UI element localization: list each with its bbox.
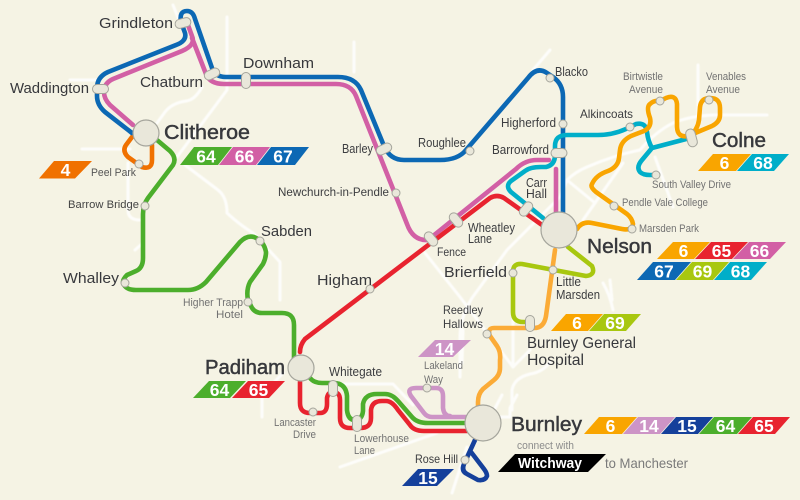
station: Padiham — [205, 355, 314, 381]
route line: 6 to Burnley — [478, 250, 555, 407]
route badges: Burnley — [584, 416, 790, 436]
stop: Grindleton: Grindleton — [99, 15, 173, 32]
stop: Marsden Park: Marsden Park — [639, 223, 699, 235]
route line: 64 south — [310, 378, 467, 423]
route badges: Colne: 6 — [720, 153, 730, 173]
route badges: Burnley General Hospital — [551, 313, 641, 333]
station: Padiham: Padiham — [205, 357, 285, 379]
stop: Higher Trapp Hotel — [183, 297, 252, 321]
stop: Alkincoats: Alkincoats — [580, 107, 633, 121]
stop: Fence: Fence — [437, 247, 466, 259]
route badges: Padiham: 65 — [249, 380, 268, 400]
route line: 69 — [513, 247, 593, 322]
stop: Carr Hall: Hall — [526, 187, 547, 201]
route badges: Burnley: 15 — [677, 416, 697, 436]
route line: 14 — [409, 388, 467, 417]
stop: Chatburn — [140, 67, 221, 91]
route badges: Burnley: 65 — [754, 416, 774, 436]
route badges: Nelson: 6 — [679, 241, 689, 261]
stop: Wheatley Lane: Wheatley — [468, 221, 516, 235]
stop: Lancaster Drive — [274, 408, 317, 441]
stop: Brierfield: Brierfield — [444, 264, 507, 281]
route badges: Nelson: 68 — [731, 262, 750, 282]
route badges: Burnley: 64 — [716, 416, 735, 436]
stop: Little Marsden: Little — [556, 275, 581, 289]
stop: Lakeland Way: Lakeland — [424, 360, 463, 372]
stop: Whitegate — [328, 365, 382, 396]
stop: South Valley Drive: South Valley Drive — [652, 179, 731, 191]
route badges: Burnley: 6 — [606, 416, 616, 436]
stop: Wheatley Lane — [447, 211, 516, 246]
stop: Lakeland Way: Way — [424, 374, 443, 386]
stop: Venables Avenue: Avenue — [706, 84, 740, 96]
route badges: Nelson: 69 — [693, 262, 712, 282]
stop: Barley: Barley — [342, 142, 374, 156]
route badges: Burnley General Hospital: 69 — [605, 313, 625, 333]
stop: Downham — [242, 55, 314, 88]
route badges: Padiham — [193, 380, 285, 400]
stop: Higher Trapp Hotel: Higher Trapp — [183, 297, 243, 309]
stop: Little Marsden — [549, 266, 600, 302]
stop: Higher Trapp Hotel: Hotel — [216, 309, 243, 321]
stop: Lancaster Drive: Lancaster — [274, 417, 316, 429]
stop: Sabden — [256, 223, 312, 245]
route line: 66 — [104, 25, 549, 240]
connection: Witchway to Manchester: connect with — [517, 440, 574, 452]
stop: Alkincoats — [580, 107, 634, 131]
stop: Burnley General Hospital — [526, 316, 636, 369]
stop: Pendle Vale College: Pendle Vale College — [622, 197, 708, 209]
stop: Higherford: Higherford — [501, 116, 556, 130]
stop: Birtwistle Avenue — [623, 71, 664, 105]
route badge: Rose Hill 15: 15 — [418, 468, 438, 488]
route badges: Clitheroe: 67 — [273, 146, 293, 166]
stop: Barrow Bridge: Barrow Bridge — [68, 199, 139, 211]
route badges: Clitheroe: 66 — [235, 146, 254, 166]
route line: 4 — [124, 137, 152, 168]
stop: Carr Hall — [517, 176, 547, 218]
stop: Barrowford: Barrowford — [492, 143, 549, 157]
route line: 15 — [463, 440, 487, 480]
route badges: Burnley: 14 — [639, 416, 659, 436]
route line: 65 south — [300, 382, 467, 431]
route line: 65 north — [300, 196, 542, 352]
route badges: Clitheroe — [180, 146, 309, 166]
station: Colne: Colne — [712, 130, 766, 152]
stop: Blacko — [546, 65, 588, 82]
connection: Witchway to Manchester — [498, 440, 688, 472]
stop: Lowerhouse Lane — [352, 416, 409, 457]
connection: Witchway to Manchester: to Manchester — [605, 455, 688, 471]
route badges: Clitheroe: 64 — [196, 146, 216, 166]
stop: Newchurch-in-Pendle: Newchurch-in-Pendle — [278, 187, 389, 199]
stop: Lakeland Way — [423, 360, 463, 392]
stop: Lowerhouse Lane: Lowerhouse — [354, 433, 409, 445]
stop: Roughlee: Roughlee — [418, 136, 466, 150]
route badges: Padiham: 64 — [210, 380, 229, 400]
stop: Burnley General Hospital: Hospital — [527, 352, 584, 369]
stop: Blacko: Blacko — [555, 65, 588, 79]
stop: Higham: Higham — [317, 272, 372, 289]
route badges: Burnley General Hospital: 6 — [572, 313, 582, 333]
stop: Lowerhouse Lane: Lane — [354, 445, 375, 457]
stop: Whalley: Whalley — [63, 270, 120, 287]
station: Nelson — [541, 212, 652, 258]
stop: Reedley Hallows: Reedley — [443, 303, 483, 317]
stop: South Valley Drive — [652, 171, 731, 191]
route line: 67 — [97, 11, 563, 215]
route badges: Colne: 68 — [753, 153, 773, 173]
route badge: Peel Park 4: 4 — [61, 160, 71, 180]
route line: 66 to Nelson — [554, 169, 558, 215]
connection: Witchway to Manchester: Witchway — [518, 456, 582, 472]
route badges: Nelson: 66 — [750, 241, 769, 261]
station: Clitheroe — [133, 120, 250, 146]
station: Burnley — [465, 405, 582, 441]
route badge: Lakeland Way 14: 14 — [435, 339, 454, 359]
station: Colne — [685, 128, 766, 152]
station: Nelson: Nelson — [587, 236, 652, 258]
stop: Birtwistle Avenue: Avenue — [629, 84, 663, 96]
stop: Fence — [422, 230, 466, 259]
stop: Reedley Hallows: Hallows — [443, 317, 483, 331]
route line: 6 to Colne — [577, 97, 720, 229]
stop: Waddington: Waddington — [10, 80, 89, 97]
stop: Venables Avenue: Venables — [706, 71, 746, 83]
stop: Reedley Hallows — [443, 303, 491, 338]
stop: Birtwistle Avenue: Birtwistle — [623, 71, 663, 83]
stop: Wheatley Lane: Lane — [468, 232, 492, 246]
stop: Burnley General Hospital: Burnley General — [527, 335, 636, 352]
route badge: Lakeland Way 14 — [418, 339, 471, 359]
stop: Downham: Downham — [243, 55, 314, 72]
stop: Peel Park — [91, 160, 143, 179]
route badges: Nelson: 65 — [712, 241, 731, 261]
route line: 64 north — [123, 140, 294, 358]
stop: Carr Hall: Carr — [526, 176, 547, 190]
stop: Rose Hill: Rose Hill — [415, 452, 458, 466]
stop: Venables Avenue — [705, 71, 746, 104]
stop: Whitegate: Whitegate — [329, 365, 382, 379]
route badge: Rose Hill 15 — [402, 468, 454, 488]
stop: Chatburn: Chatburn — [140, 74, 203, 91]
route badges: Nelson — [637, 241, 786, 282]
stop: Sabden: Sabden — [261, 223, 312, 240]
route badges: Colne — [698, 153, 789, 173]
stop: Peel Park: Peel Park — [91, 167, 136, 179]
station: Clitheroe: Clitheroe — [164, 122, 250, 144]
stop: Barley — [342, 142, 393, 156]
route badge: Peel Park 4 — [39, 160, 92, 180]
route line: 68 — [508, 124, 690, 218]
stop: Little Marsden: Marsden — [556, 288, 600, 302]
stop: Lancaster Drive: Drive — [293, 429, 316, 441]
route badges: Nelson: 67 — [654, 262, 674, 282]
station: Burnley: Burnley — [511, 414, 582, 436]
